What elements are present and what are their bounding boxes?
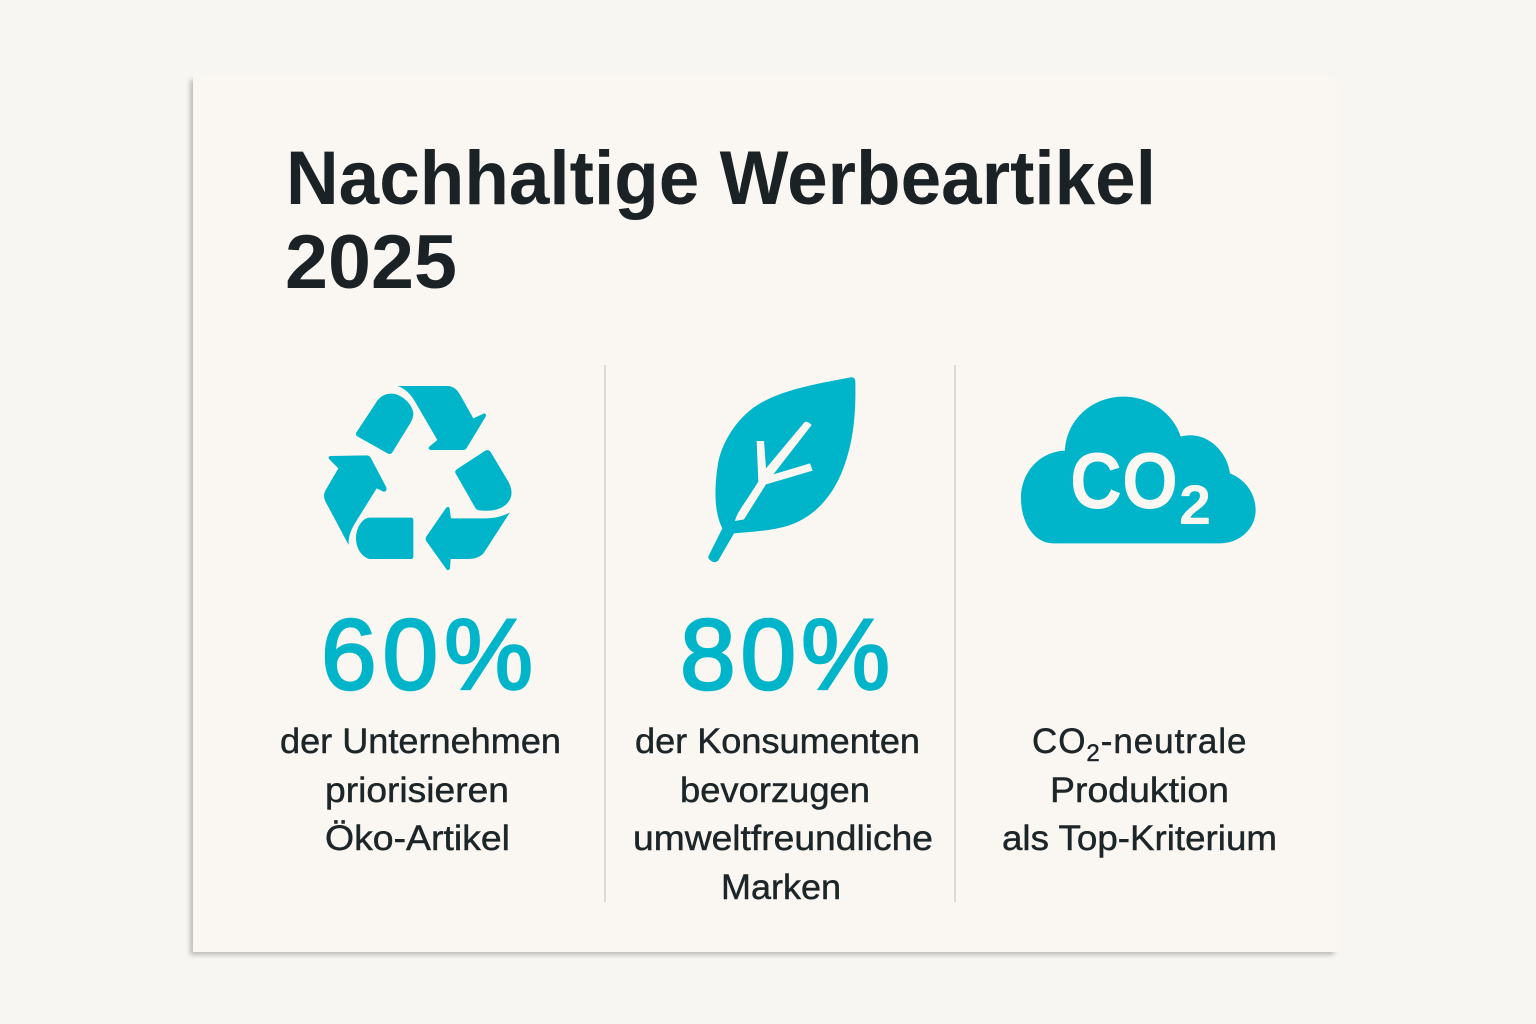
description: consumers: umweltfreundliche bbox=[633, 819, 933, 858]
description: CO2: 2 bbox=[1086, 740, 1101, 767]
title bbox=[285, 136, 1156, 305]
stat: 80%: 80% bbox=[680, 599, 890, 711]
title: 2025 bbox=[285, 220, 457, 305]
description: consumers: bevorzugen bbox=[680, 771, 870, 810]
title: Nachhaltige Werbeartikel bbox=[286, 136, 1156, 221]
description: CO2: als Top-Kriterium bbox=[1002, 819, 1277, 858]
description: companies bbox=[280, 722, 561, 858]
stat: 60%: 60% bbox=[321, 599, 533, 711]
icon: recycling arrows bbox=[324, 386, 512, 570]
description: companies: Öko-Artikel bbox=[325, 819, 510, 858]
description: CO2: Produktion bbox=[1050, 771, 1229, 810]
description: consumers bbox=[633, 722, 933, 907]
icon: leaf bbox=[708, 377, 855, 562]
icon: CO2 cloud: CO bbox=[1070, 436, 1178, 525]
description: CO2 bbox=[1002, 722, 1277, 858]
description: companies: priorisieren bbox=[325, 771, 509, 810]
description: consumers: der Konsumenten bbox=[635, 722, 920, 761]
description: companies: der Unternehmen bbox=[280, 722, 561, 761]
icon: CO2 cloud bbox=[1021, 397, 1256, 543]
card bbox=[193, 76, 1338, 952]
description: CO2: CO bbox=[1032, 722, 1086, 761]
icon: CO2 cloud: 2 bbox=[1179, 473, 1211, 536]
panel: CO2 bbox=[1002, 397, 1277, 858]
description: consumers: Marken bbox=[721, 868, 841, 907]
description: CO2: -neutrale bbox=[1101, 722, 1247, 761]
panel: companies bbox=[280, 386, 561, 858]
panel: consumers bbox=[633, 377, 933, 907]
